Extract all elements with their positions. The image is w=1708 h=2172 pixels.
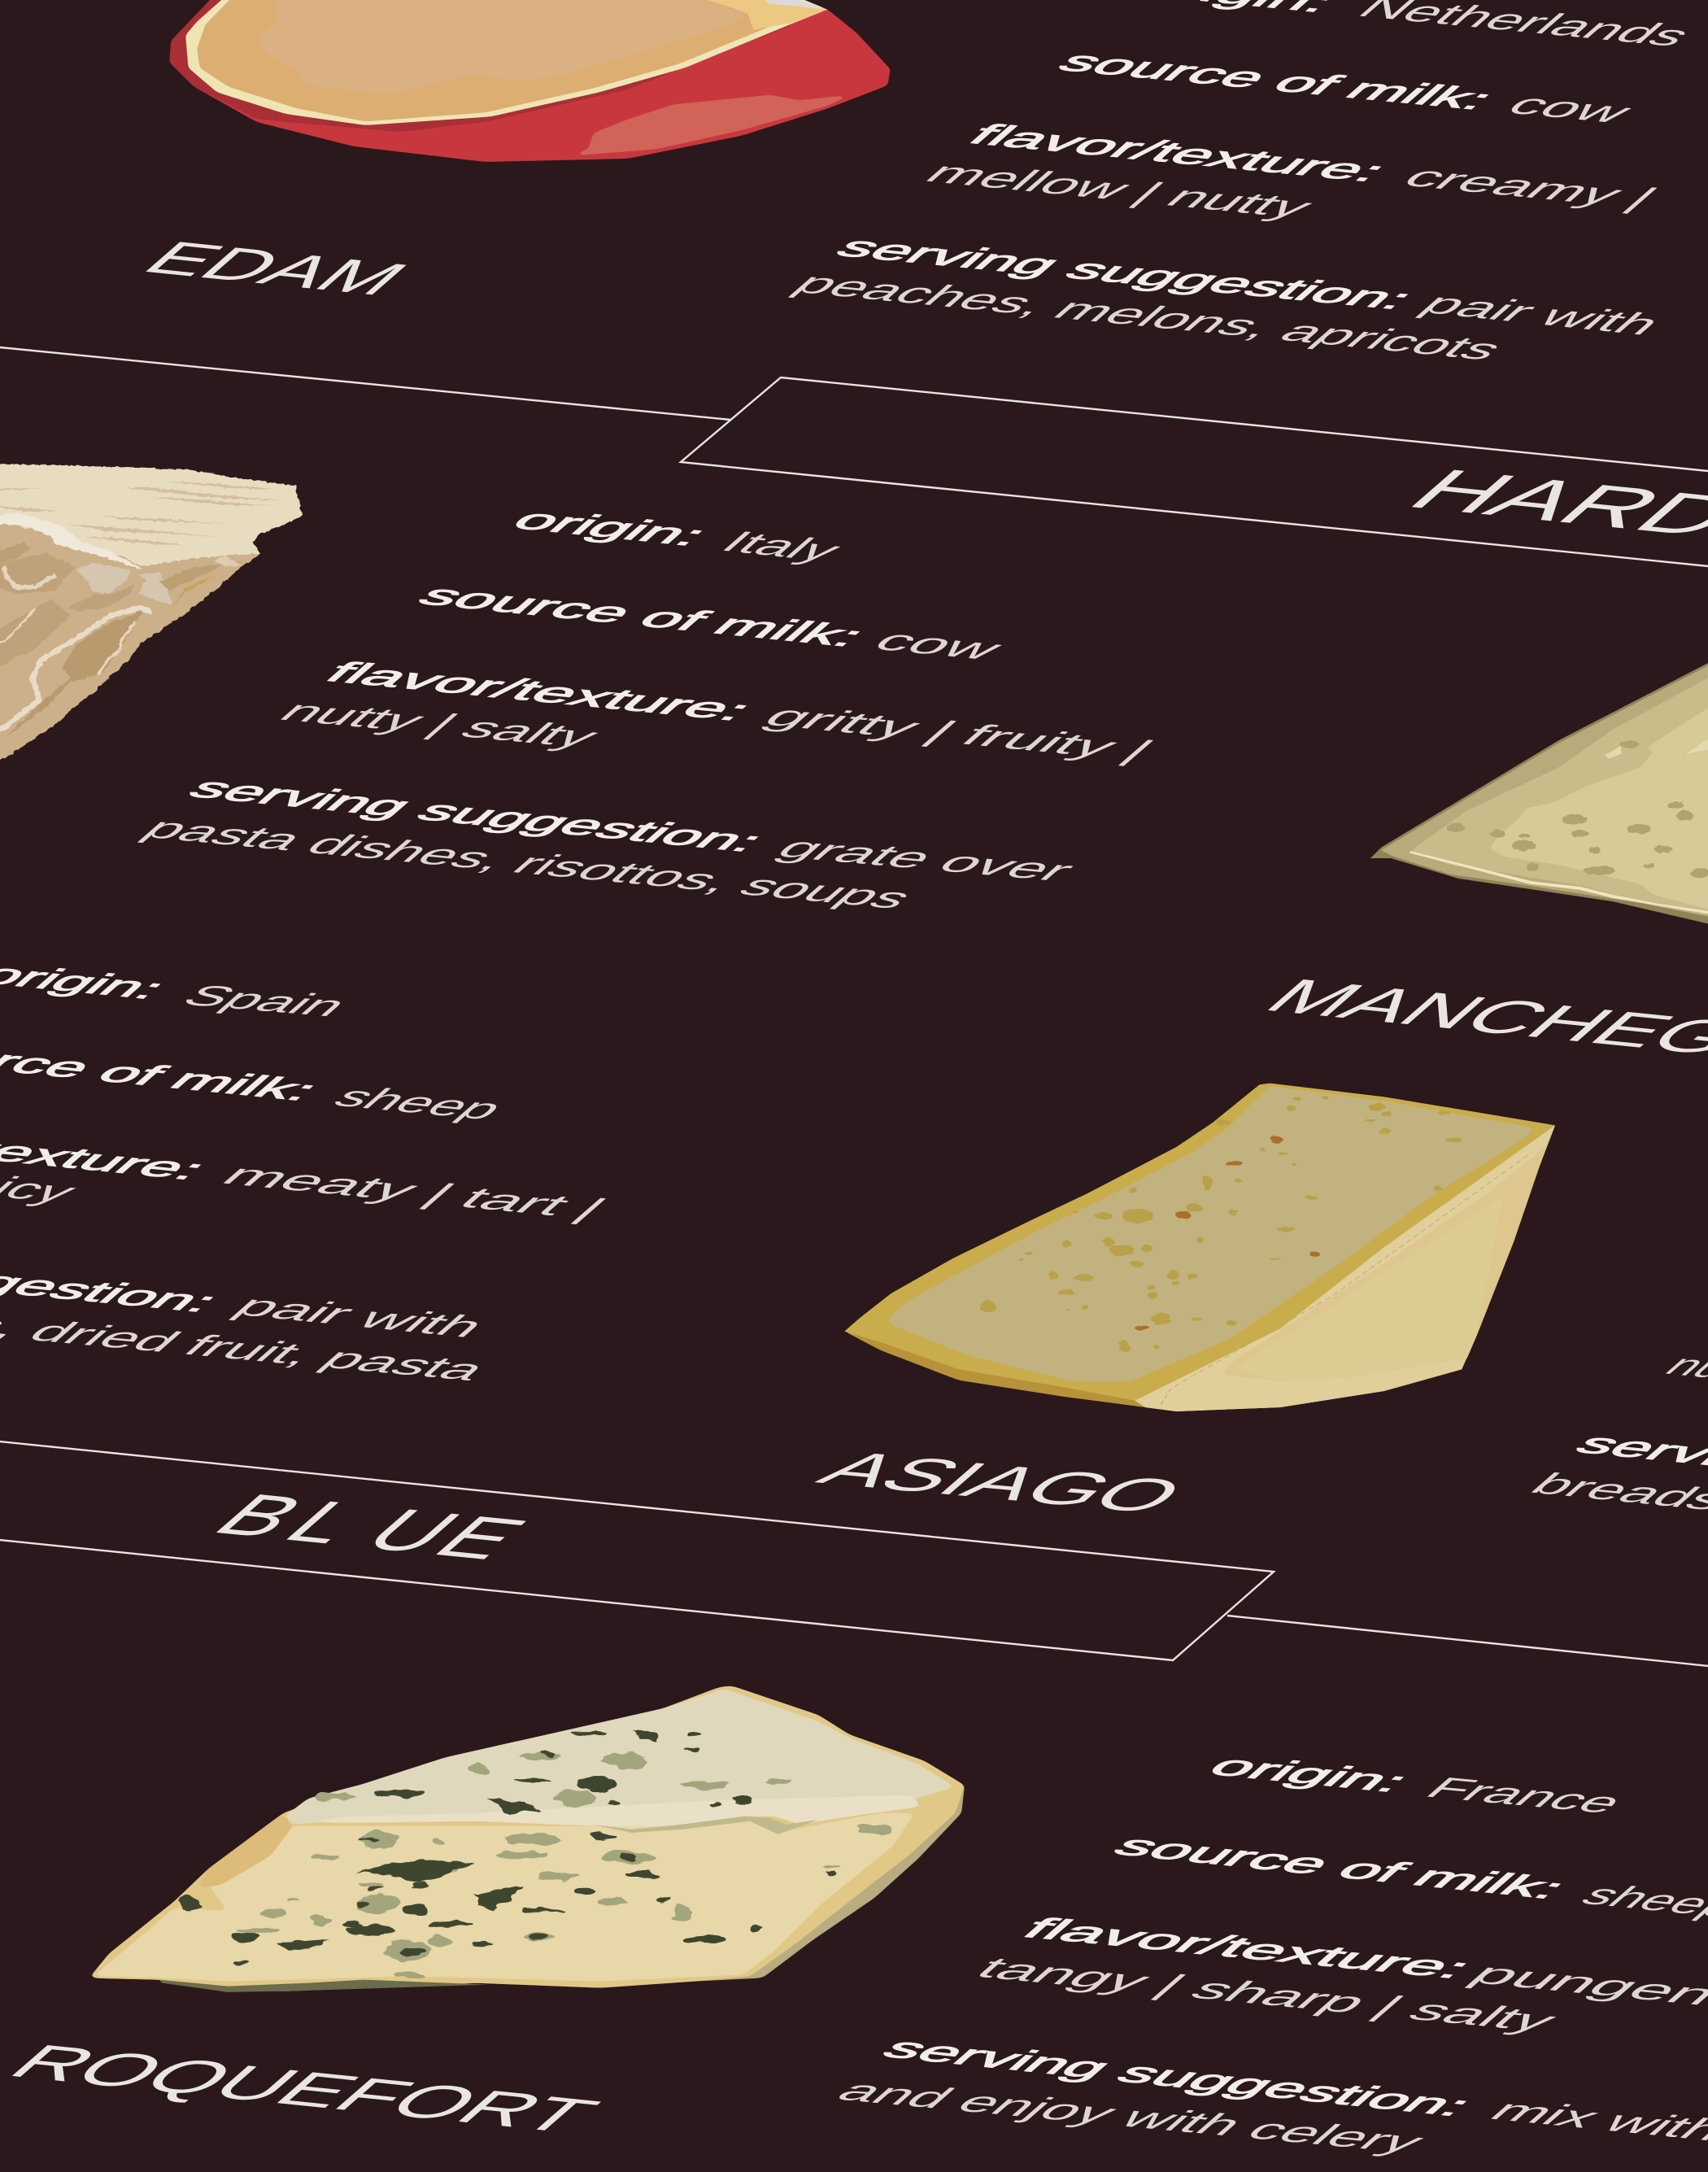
- heading: ASIAGO: ASIAGO: [803, 1442, 1200, 1524]
- origin line: [0, 958, 359, 1023]
- serving suggestion lines: serving suggestion:: [826, 231, 1424, 316]
- section banner: HARD: [0, 347, 1708, 567]
- serving suggestion lines: peaches, melons, apricots: [783, 267, 1514, 366]
- section banner: BLUE: [0, 1441, 1708, 1667]
- serving suggestion lines: [783, 231, 1672, 366]
- mold veins, light: [237, 1752, 892, 1978]
- heading: BLUE: BLUE: [195, 1482, 545, 1572]
- origin line: Italy: [711, 526, 852, 568]
- text block: Edam details: [783, 0, 1702, 366]
- origin line: origin:: [1198, 1750, 1420, 1799]
- serving suggestion lines: serving suggestion:: [178, 772, 774, 858]
- flavor and texture lines: gritty | fruity |: [753, 700, 1165, 767]
- illustration: Parmesan wedge: [0, 464, 303, 765]
- illustration: Asiago wedge: [844, 1084, 1555, 1411]
- text block: Asiago details: [1520, 1349, 1708, 1557]
- text block: Parmesan details: [133, 504, 1165, 915]
- serving suggestion lines: grate over: [766, 831, 1086, 888]
- serving suggestion lines: pair with: [224, 1289, 496, 1344]
- source of milk line: source of milk:: [1103, 1830, 1577, 1905]
- origin line: France: [1415, 1772, 1635, 1820]
- flavor and texture lines: [915, 119, 1668, 225]
- source of milk line: [1048, 46, 1643, 129]
- source of milk line: sheep: [323, 1080, 515, 1126]
- source of milk line: [0, 1035, 515, 1126]
- text block: Manchego details: [0, 958, 617, 1387]
- flavor and texture lines: nutty | salty: [269, 695, 610, 754]
- source of milk line: [407, 579, 1013, 666]
- origin line: origin:: [502, 504, 718, 552]
- flavor and texture lines: meaty | tart |: [211, 1158, 617, 1225]
- mold veins, dark: [181, 1729, 838, 1966]
- heading: ROQUEFORT: ROQUEFORT: [0, 2035, 613, 2143]
- serving suggestion lines: [826, 2032, 1708, 2159]
- flavor and texture lines: flavor/texture:: [1012, 1912, 1483, 1985]
- serving suggestion lines: mix with: [1479, 2094, 1708, 2147]
- serving suggestion lines: [133, 772, 1086, 915]
- origin line: [1130, 0, 1702, 53]
- serving suggestion lines: serving suggestion:: [872, 2032, 1483, 2122]
- serving suggestion lines: pasta dishes, risottos, soups: [133, 812, 924, 915]
- source of milk line: cow: [863, 624, 1013, 666]
- origin line: [502, 504, 852, 568]
- serving suggestion lines: [0, 1233, 499, 1387]
- flavor and texture lines: flavor/texture:: [958, 119, 1397, 188]
- heading: EDAM: EDAM: [129, 233, 423, 305]
- serving suggestion lines: and enjoy with celery: [826, 2074, 1436, 2159]
- flavor and texture lines: mellow | nutty: [915, 156, 1324, 225]
- flavor and texture lines: [965, 1912, 1708, 2038]
- source of milk line: [1103, 1830, 1708, 1924]
- flavor and texture lines: [269, 656, 1165, 767]
- heading: HARD: HARD: [1389, 458, 1708, 548]
- heading: MANCHEGO: MANCHEGO: [1249, 970, 1708, 1071]
- flavor and texture lines: flavor/texture:: [315, 656, 763, 727]
- source of milk line: cow: [1497, 88, 1643, 129]
- origin line: Spain: [172, 979, 359, 1023]
- flavor and texture lines: tangy | sharp | salty: [965, 1952, 1568, 2038]
- origin line: [1198, 1750, 1635, 1820]
- flavor and texture lines: creamy |: [1392, 160, 1668, 215]
- serving suggestion lines: pair with: [1410, 287, 1672, 342]
- illustration: Manchego wedge: [1370, 651, 1708, 930]
- flavor and texture lines: [0, 1115, 617, 1225]
- text block: Roquefort details: [826, 1750, 1708, 2159]
- source of milk line: sheep: [1571, 1878, 1708, 1924]
- source of milk line: source of milk:: [407, 579, 876, 653]
- illustration: Edam cheese wedge: [169, 0, 891, 162]
- flavor and texture lines: pungent |: [1459, 1957, 1708, 2017]
- source of milk line: source of milk:: [1048, 46, 1505, 116]
- illustration: Roquefort wedge: [89, 1686, 965, 1992]
